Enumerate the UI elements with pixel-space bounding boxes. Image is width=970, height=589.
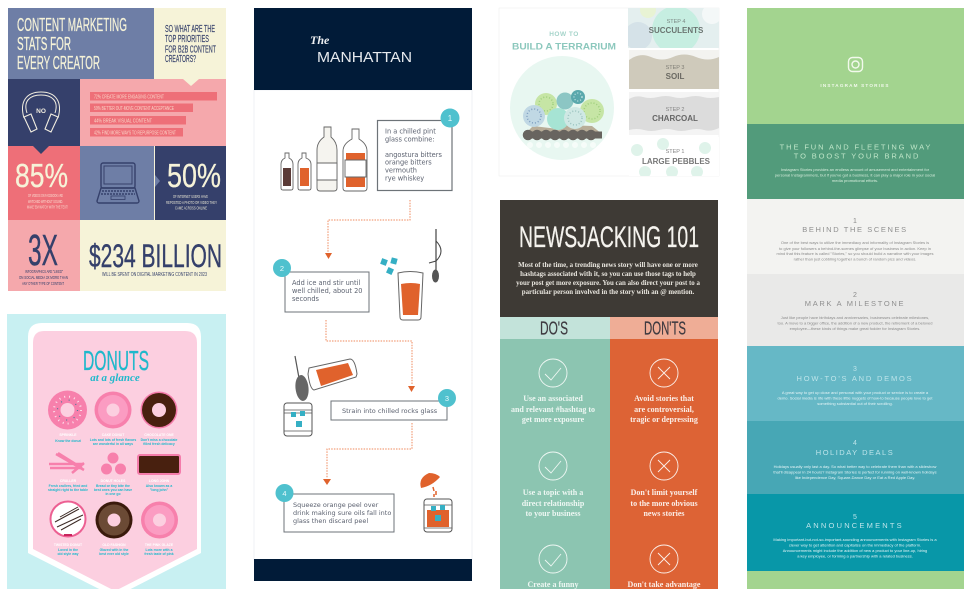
priority bars: 42% FIND MORE WAYS TO REPURPOSE CONTENT [94, 130, 176, 136]
headphones block [8, 79, 80, 154]
donut captions: Lots more with a [146, 548, 173, 552]
icon: instagram [848, 58, 862, 72]
panel: content marketing stats [8, 8, 226, 291]
icon: long john [138, 455, 180, 474]
section 2: employee—these kinds of things make great fodder for Instagram Stories. [790, 326, 920, 331]
don'ts column: Don't take advantage [628, 580, 701, 589]
donut captions [48, 433, 178, 556]
footer band [747, 571, 964, 589]
title [83, 345, 149, 384]
step 3 strip: SOIL [666, 72, 684, 81]
don'ts column: Don't limit yourself [631, 488, 698, 497]
section 1: 1 [853, 218, 857, 225]
step 3 strip [629, 50, 719, 89]
section 1: rather than just cobbling together a bunch of random pics and videos. [794, 256, 916, 262]
step 2 box: seconds [292, 295, 320, 303]
donut captions: old style way [57, 552, 79, 556]
header block [500, 200, 718, 317]
donut captions: SPRINKLE [59, 433, 77, 437]
don'ts column [610, 317, 718, 589]
panel: build a terrarium [499, 2, 722, 178]
stat: $234 billion: $234 BILLION [89, 238, 222, 274]
header: The [310, 33, 330, 47]
icon: twists [49, 453, 84, 473]
step 2 box: well chilled, about 20 [292, 287, 362, 295]
section 4: HOLIDAY DEALS [816, 448, 894, 457]
icon: glazed donut [94, 392, 132, 428]
section 5: clever way to get attention and capitalize on the immediacy of the platform. [789, 542, 921, 548]
section 2: MARK A MILESTONE [805, 299, 905, 308]
intro section: THE FUN AND FLEETING WAY [780, 142, 932, 152]
title: DONUTS [83, 345, 149, 376]
donut captions: fresh taste of pink [144, 552, 174, 556]
intro section: Instagram Stories provides an endless amount of amusement and entertainment for [781, 167, 930, 172]
step 1 box: vermouth [385, 166, 417, 174]
header block: NEWSJACKING 101 [519, 221, 699, 254]
intro section: personal Instagrammers, but if you've got a business, it can play a major role in your social [775, 172, 935, 178]
donut captions: OLD FASHION [102, 543, 126, 547]
section 4: like Independence Day, Square-Dance Day or Eat a Red Apple Day. [795, 475, 915, 480]
donut captions: Fresh crullers, fried and [49, 484, 87, 488]
donut captions: LONG JOHN [149, 479, 170, 483]
cover [747, 8, 964, 124]
title: at a glance [90, 372, 140, 384]
icon: laptop [80, 146, 154, 220]
step 2 strip: CHARCOAL [652, 114, 698, 123]
stat: 3x: ON SOCIAL MEDIA 3X MORE THAN [19, 275, 68, 280]
do's column: Create a funny [528, 580, 578, 589]
step 2 box: 2 [280, 264, 284, 273]
icon: four bottles [281, 127, 367, 191]
donut captions: best ever old style [99, 552, 129, 556]
section 3 [747, 346, 964, 421]
step 1 box: orange bitters [385, 158, 432, 166]
section 1 [747, 199, 964, 274]
title [512, 31, 616, 52]
section 5: Making important-but-not-so-important-sounding announcements with Instagram Stories is a [773, 537, 937, 542]
step 1 box: In a chilled pint [385, 128, 436, 136]
don'ts column: Avoid stories that [634, 394, 694, 403]
stat: 85% [8, 146, 80, 220]
arrow: step 3 to 4 [323, 423, 412, 485]
arrow: step 1 to 2 [325, 200, 410, 259]
step 4 box: glass then discard peel [293, 517, 368, 525]
header block: hashtags associated with it, so you can use those tags to help [520, 271, 696, 278]
donut captions: filled fresh delicacy [143, 442, 175, 446]
intro section: TO BOOST YOUR BRAND [794, 152, 920, 160]
donut captions: CRULLER [60, 479, 77, 483]
step 1 strip: STEP 1 [666, 149, 684, 155]
donut captions: DONUT HOLES [101, 479, 126, 483]
intro section [747, 124, 964, 199]
priority bars: 72% CREATE MORE ENGAGING CONTENT [94, 94, 164, 100]
step 4 box: Squeeze orange peel over [293, 501, 379, 509]
question text: TOP PRIORITIES [165, 34, 209, 45]
title: HOW TO [549, 31, 579, 38]
icon: strawberry donut [141, 502, 178, 538]
donut captions: are wonderful in all ways [93, 442, 133, 446]
priority bars: 44% BREAK VISUAL CONTENT [94, 118, 152, 124]
section 3: HOW-TO'S AND DEMOS [797, 374, 913, 383]
donut grid [48, 390, 180, 556]
don'ts column: are controversial, [634, 405, 694, 414]
stat: 50%: 50% [167, 157, 221, 194]
do's column: Use a topic with a [523, 488, 583, 497]
don'ts column: to the more obvious [630, 499, 698, 508]
do's column [500, 317, 610, 589]
section 5: 5 [853, 514, 857, 521]
question text [165, 24, 216, 65]
step 2 strip [629, 92, 719, 135]
section 2: 2 [853, 292, 857, 299]
donut captions: Bread or tiny bite the [96, 484, 130, 488]
donut captions: Lots and lots of fresh flavors [90, 438, 136, 442]
step 2 strip: STEP 2 [666, 107, 684, 113]
stat: 85%: MAKE 'EM WATCH WITH THE TEXT! [27, 204, 68, 210]
section 5: a key employee, or forming a partnership with a related business. [797, 554, 913, 558]
question text: FOR B2B CONTENT [165, 44, 216, 56]
icon: chocolate donut [140, 392, 178, 428]
stat: 50% [155, 146, 226, 220]
step 4 box: 4 [282, 489, 287, 498]
step 2 box: Add ice and stir until [292, 279, 360, 287]
icon: donut holes [101, 452, 126, 474]
header block: particular person involved in the story with an @ mention. [522, 289, 694, 296]
icon: drizzle donut [50, 502, 86, 536]
priority bars: 59% BETTER OUT-MOVE CONTENT ACCEPTANCE [94, 106, 174, 112]
banner [28, 323, 201, 589]
icon: sprinkle donut [48, 390, 87, 430]
section 5: Announcements might include the addition of new a product to your line-up, hiring [783, 548, 927, 553]
section 4: that'll disappear in 24 hours? Instagram Stories is perfect for running on well-known holidays [773, 470, 937, 474]
don'ts column: tragic or depressing [630, 415, 698, 424]
icon: crosses [650, 359, 678, 573]
stat: 50%: OF INTERNET USERS HAVE [173, 194, 208, 199]
donut captions: TWISTED DONUT [54, 543, 83, 547]
section 1: mind that this feature is called "Stories," so you should build a narrative with your images [777, 251, 933, 256]
illustration: terrarium globe [510, 56, 614, 160]
icon: orange peel and drink [420, 473, 452, 532]
stat: 3x: INFOGRAPHICS ARE "LIKED" [25, 269, 63, 274]
stat: $234 billion: WILL BE SPENT ON DIGITAL MARKETING CONTENT IN 2023 [102, 272, 207, 278]
section 4: Holidays usually only last a day. So what better way to celebrate them than with a slideshow [774, 464, 936, 469]
priority bars [80, 79, 226, 146]
donut captions: straight right to the table [48, 488, 88, 492]
do's column: and relevant #hashtag to [511, 405, 595, 414]
panel: donuts at a glance [7, 314, 226, 589]
section 1: to give your followers a behind-the-scenes glimpse of your business in action. Keep in [779, 246, 931, 251]
question text: CREATORS? [165, 54, 196, 65]
do's column: get more exposure [522, 415, 585, 424]
do's column: to your business [526, 509, 580, 518]
section 2: Just like people have birthdays and anniversaries, businesses celebrate milestones, [781, 315, 929, 320]
step 3 box: 3 [445, 394, 449, 403]
section 2: too. A move to a bigger office, the addition of a new product, the retirement of a beloved [778, 320, 932, 326]
stat: 3x [8, 220, 80, 291]
panel heading block: CONTENT MARKETING [17, 15, 127, 35]
don'ts column: DON'TS [644, 318, 686, 338]
step 4 strip [628, 8, 719, 48]
panel heading block [8, 8, 154, 79]
step 3 box [331, 389, 456, 420]
headphones block: NO [36, 108, 46, 115]
header: MANHATTAN [317, 49, 412, 66]
step 1 strip: LARGE PEBBLES [642, 157, 711, 166]
step 1 box: angostura bitters [385, 151, 442, 159]
stat: 85%: WATCHED WITHOUT SOUND. [28, 199, 63, 204]
section 3: A great way to get up close and personal with your product or service is to create a [782, 390, 929, 395]
panel: newsjacking 101 [500, 200, 718, 589]
stat: 50%: REPOSTED A PHOTO OR VIDEO THEY [166, 200, 217, 205]
step 4 strip: SUCCULENTS [649, 26, 704, 35]
stat: 3x: 3X [28, 226, 58, 275]
step 4 box [276, 484, 394, 532]
donut captions: in one go [105, 492, 121, 496]
donut captions: Know the donut [55, 439, 82, 443]
step 1 box [378, 108, 460, 190]
section 5 [747, 494, 964, 571]
step 4 box: drink making sure oils fall into [293, 509, 391, 517]
stat: 85%: 85% [15, 157, 68, 194]
section 3: demo. Social media is rife with these little nuggets of how-to because people love to get [778, 396, 933, 400]
section 5: ANNOUNCEMENTS [806, 521, 904, 530]
donut captions: THE PINK GLAZE [145, 543, 174, 547]
don'ts column: news stories [643, 509, 685, 518]
donut captions: CAKE DONUT [102, 433, 125, 437]
header block: Most of the time, a trending news story will have one or more [518, 262, 698, 269]
section 4: 4 [853, 440, 857, 447]
intro section: media promotional efforts. [832, 178, 878, 183]
section 1: One of the best ways to utilize the immediacy and informality of Instagram Stories is [781, 240, 929, 245]
title: BUILD A TERRARIUM [512, 42, 616, 52]
donut captions: Glazed with in the [100, 548, 129, 552]
section 4 [747, 421, 964, 494]
section 3: 3 [853, 366, 857, 373]
step 4 strip: STEP 4 [667, 19, 685, 25]
question text: SO WHAT ARE THE [165, 24, 215, 35]
panel: instagram stories [747, 8, 964, 589]
donut captions: best ones you can have [94, 488, 132, 492]
cover: INSTAGRAM STORIES [820, 83, 890, 88]
do's column: DO'S [540, 318, 568, 338]
panel heading block: EVERY CREATOR [17, 53, 100, 73]
donut captions: Don't miss a chocolate [141, 438, 178, 442]
step 3 strip: STEP 3 [666, 65, 684, 71]
stat: 50%: CAME ACROSS ONLINE [175, 206, 207, 210]
step 1 box: 1 [448, 114, 453, 123]
section 2 [747, 274, 964, 346]
do's column: direct relationship [522, 499, 585, 508]
header [254, 8, 472, 90]
donut captions: CHOCOLATE ONE [144, 433, 174, 437]
icon: straining glass [284, 356, 357, 436]
donut captions: Loved in the [58, 548, 78, 552]
do's column: Use an associated [523, 394, 583, 403]
header block: your post get more exposure. You can also direct your post to a [516, 280, 700, 287]
step 2 box [273, 259, 369, 312]
icon: checks [539, 359, 567, 573]
donut captions: Also known as a [146, 484, 172, 488]
panel heading block: STATS FOR [17, 34, 71, 54]
step 1 box: glass combine: [385, 136, 435, 144]
icon: glass with ice and spoon [380, 229, 441, 320]
section 3: something substantial out of their scrolling. [817, 401, 893, 406]
footer bar [254, 559, 472, 581]
step 1 box: rye whiskey [385, 174, 424, 182]
icon: cocoa donut [96, 502, 132, 538]
panel: the manhattan [254, 8, 472, 581]
arrow: step 2 to 3 [326, 320, 415, 392]
stat: 85%: OF VIDEOS ON FACEBOOK ARE [28, 193, 63, 198]
donut captions: "long john" [150, 488, 169, 492]
step 1 strip [629, 137, 719, 178]
section 1: BEHIND THE SCENES [802, 225, 908, 234]
stat: $234 billion [89, 238, 222, 278]
stat: 3x: ANY OTHER TYPE OF CONTENT [22, 281, 64, 286]
step 3 box: Strain into chilled rocks glass [342, 407, 438, 415]
